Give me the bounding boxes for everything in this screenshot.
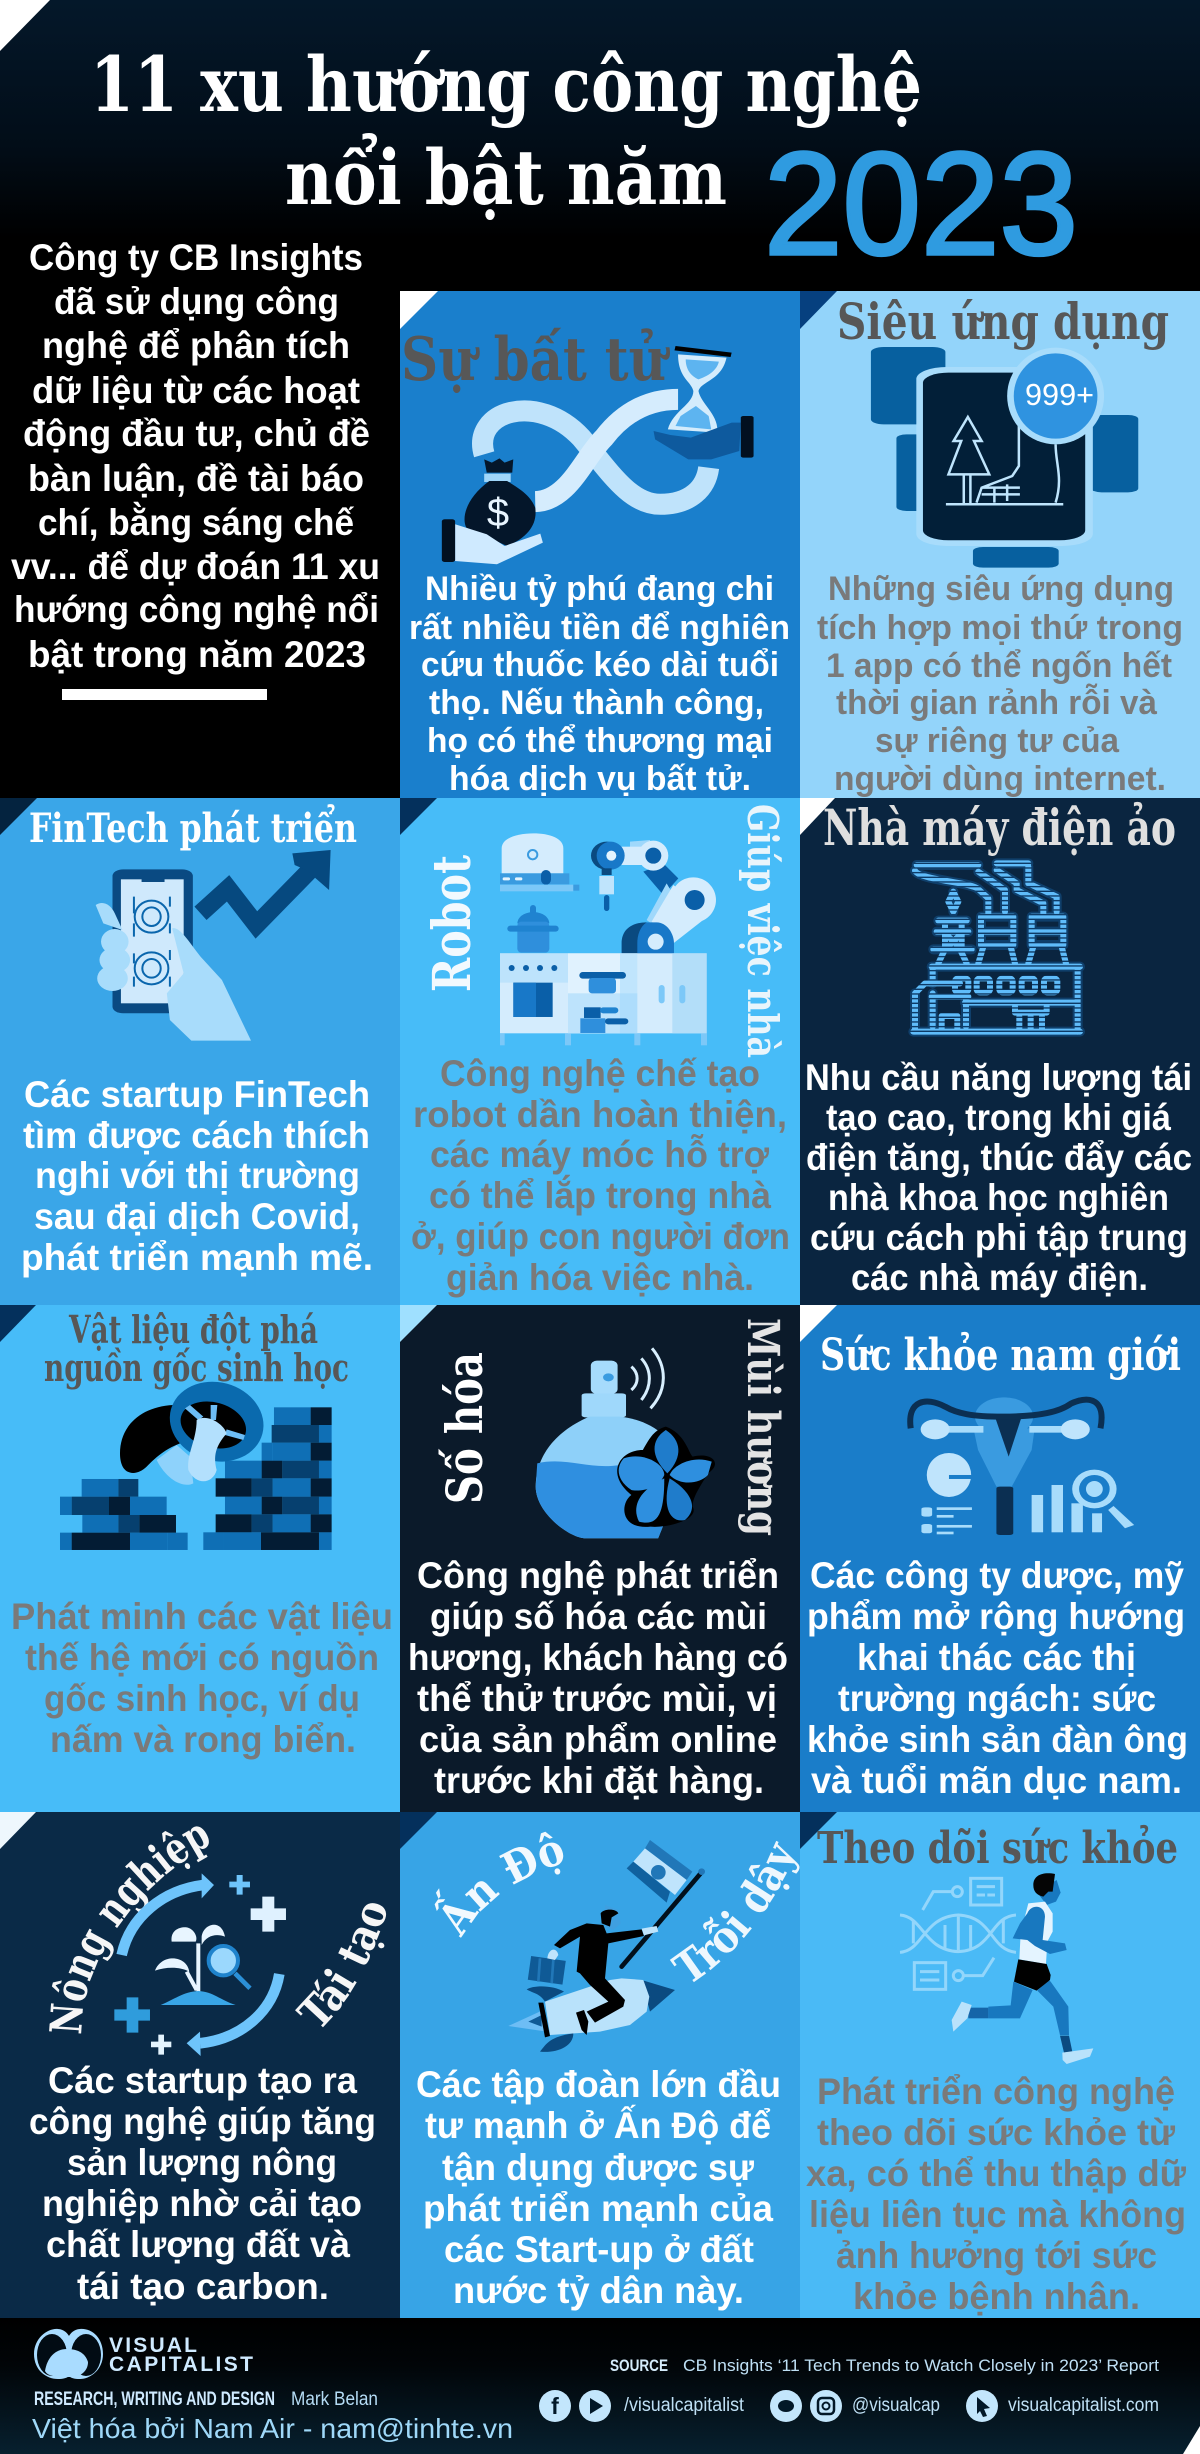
text: tìm được cách thích (23, 1115, 370, 1156)
text: nhà khoa học nghiên (828, 1177, 1169, 1218)
text: sau đại dịch Covid, (34, 1196, 360, 1237)
vertical label Số hóa: Số hóa (435, 1352, 494, 1504)
source: SOURCE (610, 2356, 668, 2375)
icon: infinity, money and hourglass: $ (487, 491, 509, 535)
text: giúp số hóa các mùi (430, 1596, 767, 1637)
text: Phát triển công nghệ (817, 2071, 1175, 2112)
icon: phone with notification: 999+ (1025, 377, 1094, 412)
text: Các startup FinTech (24, 1074, 370, 1115)
text: ảnh hưởng tới sức (836, 2235, 1157, 2276)
title: 11 xu hướng công nghệ (90, 40, 922, 129)
curved label Ấn Độ: Ấn Độ (434, 1832, 564, 1938)
panel: Nông nghiệp tái tạo (0, 1812, 400, 2318)
text: rất nhiều tiền để nghiên (409, 609, 790, 647)
text: ở, giúp con người đơn (411, 1216, 790, 1257)
text: phát triển mạnh mẽ. (21, 1237, 373, 1278)
text: thể thử trước mùi, vị (417, 1678, 777, 1719)
curved label Nông nghiệp: Nông nghiệp (49, 1826, 209, 2034)
text: các máy móc hỗ trợ (430, 1134, 770, 1175)
text: và tuổi mãn dục nam. (811, 1760, 1182, 1801)
text (408, 1555, 788, 1801)
icon: infinity, money and hourglass (442, 346, 754, 564)
corner triangle (0, 0, 50, 51)
text: của sản phẩm online (419, 1719, 777, 1760)
icon: perfume bottle and flower (536, 1348, 715, 1538)
icon: phone and growth arrow (96, 850, 331, 1041)
panel: Ấn Độ trỗi dậy (400, 1812, 800, 2318)
text: hóa dịch vụ bất tử. (449, 760, 751, 798)
text: Phát minh các vật liệu (11, 1596, 393, 1637)
header background (0, 0, 1200, 291)
text: khai thác các thị (857, 1637, 1136, 1678)
text: thế hệ mới có nguồn (25, 1637, 379, 1678)
text (805, 1057, 1192, 1298)
icon: businessman on rocket with flag (508, 1840, 705, 2052)
panel: Nhà máy điện ảo (800, 798, 1200, 1305)
panel: intro: nghệ để phân tích (42, 325, 350, 366)
text: Công nghệ phát triển (417, 1555, 779, 1596)
panel: intro: chí, bằng sáng chế (38, 501, 354, 543)
text: người dùng internet. (834, 760, 1166, 798)
social icons: @visualcap (852, 2395, 940, 2416)
heading: FinTech phát triển (29, 805, 357, 852)
text: nghiệp nhờ cải tạo (42, 2183, 362, 2224)
text: công nghệ giúp tăng (29, 2101, 376, 2142)
text: xa, có thể thu thập dữ (806, 2153, 1186, 2194)
localisation credit: Việt hóa bởi Nam Air - nam@tinhte.vn (32, 2413, 513, 2444)
text: cứu cách phi tập trung (810, 1217, 1188, 1258)
logo text: VISUAL (109, 2334, 197, 2357)
title: nổi bật năm (285, 132, 727, 222)
text: tái tạo carbon. (77, 2266, 329, 2307)
title (44, 1307, 349, 1390)
curved label Tái tạo: Tái tạo (295, 1903, 386, 2028)
source: CB Insights ‘11 Tech Trends to Watch Closely in 2023’ Report (683, 2356, 1159, 2375)
panel: Sự bất tử (400, 291, 800, 798)
panel: Robot giúp việc nhà (400, 798, 800, 1305)
panel: Theo dõi sức khỏe (800, 1812, 1200, 2318)
text: gốc sinh học, ví dụ (44, 1678, 360, 1719)
panel: intro: Công ty CB Insights (29, 237, 363, 278)
panel: Sức khỏe nam giới (800, 1305, 1200, 1812)
text: phát triển mạnh của (423, 2188, 773, 2229)
text (411, 1053, 790, 1298)
text: sự riêng tư của (875, 722, 1120, 760)
panel: Siêu ứng dụng (800, 291, 1200, 798)
text: các nhà máy điện. (851, 1257, 1148, 1298)
vertical label Giúp việc nhà: Giúp việc nhà (738, 804, 787, 1058)
text (409, 570, 790, 798)
text: nước tỷ dân này. (453, 2270, 744, 2311)
text: Các công ty dược, mỹ (810, 1555, 1184, 1596)
text: thọ. Nếu thành công, (429, 684, 764, 722)
text: các Start-up ở đất (444, 2229, 754, 2270)
panel: Vật liệu đột phá (0, 1305, 400, 1812)
text: tích hợp mọi thứ trong (817, 609, 1183, 647)
text: Những siêu ứng dụng (828, 570, 1174, 608)
panel: intro: bật trong năm 2023 (28, 634, 366, 675)
text: có thể lắp trong nhà (429, 1174, 771, 1216)
text: 1 app có thể ngốn hết (826, 647, 1172, 685)
text: họ có thể thương mại (427, 722, 773, 760)
text (807, 1555, 1188, 1801)
panel: intro: hướng công nghệ nổi (14, 589, 379, 630)
text (806, 2071, 1186, 2317)
panel: intro: dữ liệu từ các hoạt (32, 370, 360, 411)
text: giản hóa việc nhà. (446, 1257, 754, 1298)
panel: FinTech phát triển (0, 798, 400, 1305)
text: Nhiều tỷ phú đang chi (425, 570, 774, 608)
icon: phone with notification (871, 347, 1138, 568)
icon: mushroom and bricks (60, 1371, 332, 1550)
text: khỏe bệnh nhân. (853, 2276, 1140, 2317)
logo text (109, 2334, 253, 2376)
social icons (539, 2390, 1159, 2422)
text: cứu thuốc kéo dài tuổi (421, 646, 779, 684)
panel: intro: bàn luận, đề tài báo (28, 458, 364, 499)
text: phẩm mở rộng hướng (807, 1596, 1185, 1637)
credits: Mark Belan (291, 2389, 378, 2410)
title (90, 40, 922, 222)
text: Các tập đoàn lớn đầu (416, 2064, 781, 2105)
social icons: visualcapitalist.com (1008, 2395, 1159, 2416)
icon: runner and DNA (900, 1873, 1093, 2064)
footer (0, 2318, 1200, 2454)
curved label Trỗi dậy: Trỗi dậy (670, 1840, 800, 1982)
panel: intro (0, 237, 400, 798)
text: Công nghệ chế tạo (440, 1053, 760, 1094)
text: tạo cao, trong khi giá (826, 1097, 1171, 1138)
icon: reproductive health (910, 1397, 1134, 1535)
text: hương, khách hàng có (408, 1637, 788, 1678)
text: chất lượng đất và (46, 2224, 350, 2265)
text: Các startup tạo ra (48, 2060, 357, 2101)
text: nấm và rong biển. (50, 1719, 356, 1760)
social icons: /visualcapitalist (624, 2395, 745, 2416)
text (817, 570, 1183, 798)
title: Vật liệu đột phá (68, 1307, 318, 1352)
text (21, 1074, 373, 1278)
panel: intro: động đầu tư, chủ đề (23, 413, 370, 454)
logo text: CAPITALIST (109, 2353, 253, 2376)
panel: intro: đã sử dụng công (54, 281, 339, 322)
year 2023: 2023 (764, 122, 1078, 285)
panel: Số hóa mùi hương (400, 1305, 800, 1812)
text: trường ngách: sức (838, 1678, 1156, 1719)
text (11, 1596, 393, 1760)
text: theo dõi sức khỏe từ (817, 2112, 1175, 2153)
vertical label Robot: Robot (422, 855, 483, 992)
social icons: f (551, 2393, 559, 2419)
title: nguồn gốc sinh học (44, 1345, 349, 1390)
panel: intro: vv... để dự đoán 11 xu (11, 546, 380, 587)
text: robot dần hoàn thiện, (413, 1094, 787, 1135)
text (416, 2064, 781, 2311)
vertical label Mùi hương: Mùi hương (737, 1318, 788, 1536)
text: liệu liên tục mà không (809, 2194, 1186, 2235)
text: tư mạnh ở Ấn Độ để (425, 2105, 771, 2146)
text: thời gian rảnh rỗi và (836, 684, 1157, 722)
text (29, 2060, 376, 2307)
text: sản lượng nông (67, 2142, 337, 2183)
icon: robot kitchen (500, 833, 716, 1045)
text: nghi với thị trường (35, 1155, 360, 1196)
heading: Sự bất tử (401, 325, 671, 395)
text: khỏe sinh sản đàn ông (807, 1719, 1188, 1760)
icon: digital factory (913, 863, 1080, 1032)
text: tận dụng được sự (442, 2147, 754, 2188)
credits: RESEARCH, WRITING AND DESIGN (34, 2389, 275, 2410)
icon: sprout and cycle (114, 1873, 286, 2056)
icon: Visual Capitalist logo (34, 2329, 103, 2379)
text: trước khi đặt hàng. (434, 1760, 764, 1801)
